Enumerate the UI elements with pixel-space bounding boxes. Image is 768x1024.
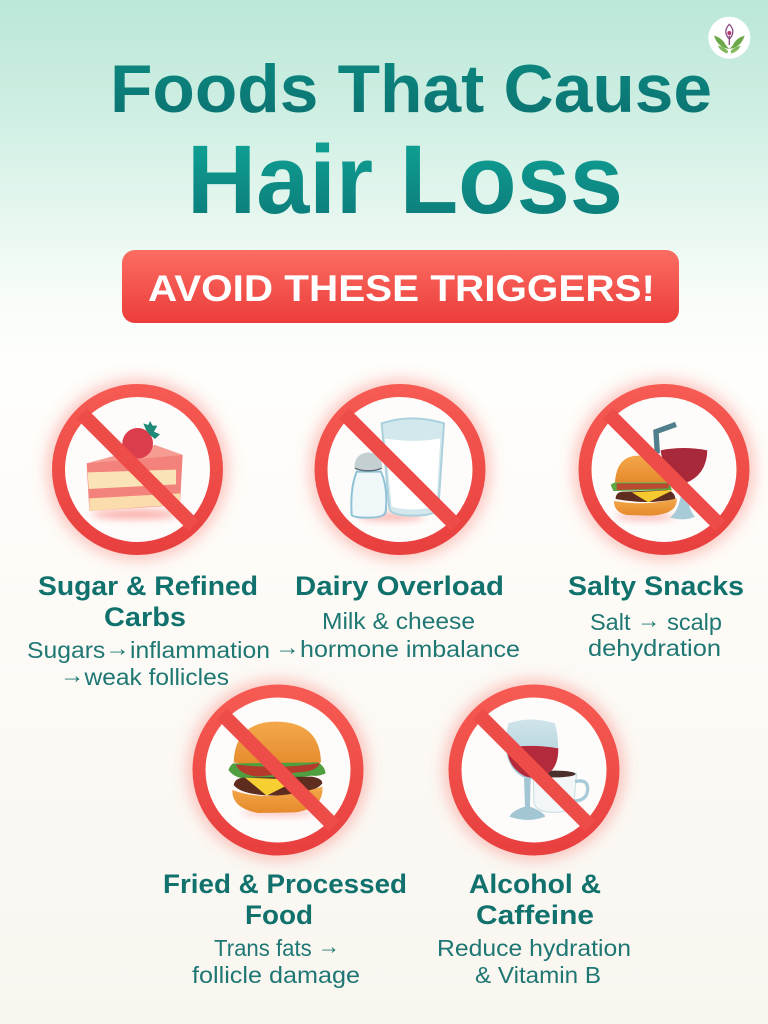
banner: avoid these triggers <box>122 250 679 323</box>
description: scalp <box>661 609 722 635</box>
panel: salty snacks <box>568 388 746 661</box>
description: → <box>637 607 661 633</box>
banner: avoid these triggers: AVOID THESE TRIGGERS! <box>148 268 655 309</box>
icon: cake prohibited <box>56 388 220 552</box>
heading: Alcohol & <box>469 869 601 899</box>
description: & Vitamin B <box>475 962 601 988</box>
description <box>588 607 722 661</box>
title: Foods That Cause <box>110 51 712 127</box>
heading: Fried & Processed <box>163 869 407 899</box>
description: Sugars <box>27 637 100 663</box>
description: inflammation <box>130 637 270 663</box>
icon: milk and salt shaker prohibited <box>318 388 482 552</box>
heading: Sugar & Refined <box>38 571 258 601</box>
panel: sugar and refined carbs <box>27 388 270 690</box>
description: → <box>275 634 300 660</box>
description: Salt <box>590 609 630 635</box>
icon: burger and wine prohibited <box>582 388 746 552</box>
heading line 2: Caffeine <box>476 900 594 930</box>
description <box>27 635 270 690</box>
description: → <box>318 933 340 959</box>
description: → <box>105 635 130 661</box>
heading: Dairy Overload <box>295 571 504 601</box>
heading line 2: Food <box>245 900 313 930</box>
description: Trans fats <box>214 935 315 961</box>
description: Reduce hydration <box>437 935 631 961</box>
panel: dairy overload <box>275 388 520 662</box>
panel: alcohol and caffeine <box>437 688 631 988</box>
description: follicle damage <box>192 962 360 988</box>
panel: fried and processed food <box>163 688 407 988</box>
description: hormone imbalance <box>300 636 520 662</box>
description <box>275 608 520 662</box>
title: Hair Loss <box>187 125 623 234</box>
description: weak follicles <box>83 664 229 690</box>
icon: wine and coffee prohibited <box>452 688 616 852</box>
heading: Salty Snacks <box>568 571 744 601</box>
description: dehydration <box>588 635 721 661</box>
description: → <box>60 662 85 688</box>
description <box>437 935 631 988</box>
description <box>192 933 360 988</box>
title <box>110 51 712 234</box>
logo badge <box>708 17 750 59</box>
description: Milk & cheese <box>322 608 475 634</box>
heading line 2: Carbs <box>104 602 186 632</box>
icon: burger prohibited <box>196 688 360 852</box>
